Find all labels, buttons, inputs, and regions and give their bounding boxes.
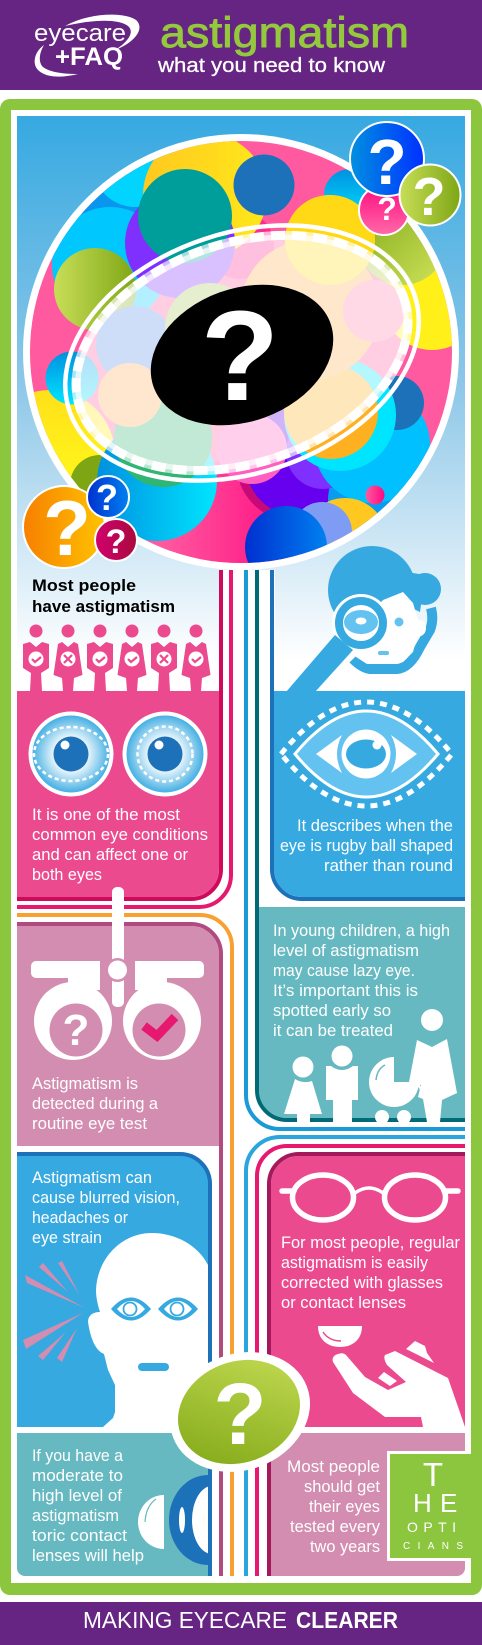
icon: person with magnifier xyxy=(286,546,441,692)
text: rugby ball: rather than round xyxy=(324,856,453,875)
text: common condition xyxy=(32,805,208,884)
text: common condition: common eye conditions xyxy=(32,825,208,844)
title: astigmatism xyxy=(160,9,409,57)
text: correction: For most people, regular xyxy=(281,1233,460,1252)
text: lazy eye: may cause lazy eye. xyxy=(273,961,415,980)
text: symptoms: cause blurred vision, xyxy=(32,1188,180,1207)
logo: eyecare FAQ: eyecare xyxy=(34,20,126,47)
icon: family with pram xyxy=(284,1009,457,1124)
main colourful eye disc xyxy=(23,134,459,570)
logo: eyecare FAQ xyxy=(34,15,139,77)
text: lazy eye xyxy=(273,921,450,1040)
icon: contact lens on hand xyxy=(318,1326,465,1427)
heading: have astigmatism xyxy=(32,597,175,616)
text: symptoms: eye strain xyxy=(32,1228,102,1247)
panel: symptoms xyxy=(17,1154,210,1427)
text: toric lenses: If you have a xyxy=(32,1446,124,1465)
text: correction: astigmatism is easily xyxy=(281,1253,428,1272)
icon: phoropter: ? xyxy=(63,1006,89,1055)
text: rugby ball: eye is rugby ball shaped xyxy=(280,836,453,855)
pipes xyxy=(17,570,465,1576)
text: toric lenses: moderate to xyxy=(32,1466,123,1485)
logo: the opticians eye chart: H xyxy=(413,1488,432,1518)
text: common condition: and can affect one or xyxy=(32,845,188,864)
header band xyxy=(0,0,482,90)
text: two years: tested every xyxy=(290,1517,380,1536)
text: eye test: detected during a xyxy=(32,1094,159,1113)
icon: normal eye xyxy=(124,714,206,794)
text: two years: Most people xyxy=(287,1457,380,1476)
panel: eye test xyxy=(17,887,221,1576)
text: correction: corrected with glasses xyxy=(281,1273,443,1292)
text: rugby ball xyxy=(280,816,453,875)
logo: the opticians eye chart: T xyxy=(423,1456,443,1493)
logo: the opticians eye chart xyxy=(387,1451,482,1561)
question bubbles bottom left: ? xyxy=(96,477,118,518)
text: toric lenses: toric contact xyxy=(32,1526,127,1545)
text: lazy eye: it can be treated xyxy=(273,1021,393,1040)
panel: most people have astigmatism xyxy=(23,576,210,691)
question bubbles top right: ? xyxy=(367,126,407,198)
text: eye test: Astigmatism is xyxy=(32,1074,138,1093)
text: lazy eye: spotted early so xyxy=(273,1001,391,1020)
panel: glasses or contact lenses xyxy=(269,1154,465,1576)
text: symptoms xyxy=(32,1168,180,1247)
text: eye test: routine eye test xyxy=(32,1114,147,1133)
panel: young children xyxy=(257,570,465,1124)
central green question bubble xyxy=(152,1332,328,1492)
logo: the opticians eye chart: CIANS xyxy=(403,1541,463,1552)
text: rugby ball: It describes when the xyxy=(297,816,453,835)
text: two years: should get xyxy=(304,1477,380,1496)
text: common condition: both eyes xyxy=(32,865,102,884)
icon: head with headache rays xyxy=(23,1233,208,1427)
panel: toric contact lenses xyxy=(17,1433,212,1576)
question bubbles top right: ? xyxy=(377,191,397,227)
question bubbles bottom left: ? xyxy=(43,484,91,572)
text: lazy eye: It’s important this is xyxy=(273,981,418,1000)
text: common condition: It is one of the most xyxy=(32,805,180,824)
question bubbles top right: ? xyxy=(412,167,446,227)
text: symptoms: Astigmatism can xyxy=(32,1168,152,1187)
central green question bubble: ? xyxy=(213,1366,267,1463)
question bubbles top right xyxy=(350,122,460,235)
footer band xyxy=(0,1602,482,1645)
icon: phoropter xyxy=(31,887,204,1060)
logo: the opticians eye chart: E xyxy=(440,1488,457,1518)
text: toric lenses: lenses will help xyxy=(32,1546,144,1565)
text: two years xyxy=(287,1457,380,1556)
panel: test every two years xyxy=(271,1433,482,1576)
subtitle: what you need to know xyxy=(157,55,386,77)
text: correction xyxy=(281,1233,460,1312)
text: eye test xyxy=(32,1074,159,1133)
text: lazy eye: level of astigmatism xyxy=(273,941,419,960)
text: toric lenses: high level of xyxy=(32,1486,122,1505)
lens overlay xyxy=(31,181,453,525)
question bubbles bottom left: ? xyxy=(106,523,126,561)
icon: toric lens and eye xyxy=(138,1475,208,1565)
text: two years: their eyes xyxy=(309,1497,380,1516)
logo: eyecare FAQ: +FAQ xyxy=(55,43,123,71)
text: two years: two years xyxy=(310,1537,380,1556)
text: toric lenses xyxy=(32,1446,144,1565)
text: symptoms: headaches or xyxy=(32,1208,128,1227)
icon: six people with checks and crosses xyxy=(23,624,210,691)
black pupil with question mark xyxy=(131,260,353,450)
text: toric lenses: astigmatism xyxy=(32,1506,119,1525)
text: correction: or contact lenses xyxy=(281,1293,406,1312)
footer band: CLEARER xyxy=(296,1607,398,1633)
black pupil with question mark: ? xyxy=(201,285,279,428)
heading: Most people xyxy=(32,576,136,595)
panel: common eye conditions xyxy=(17,570,221,899)
icon: astigmatic eye xyxy=(30,714,112,794)
panel: rugby ball shaped xyxy=(272,546,465,899)
question bubbles bottom left xyxy=(23,476,137,572)
icon: glasses xyxy=(282,1175,458,1220)
logo: the opticians eye chart: OPTI xyxy=(407,1519,456,1535)
footer band: MAKING EYECARE xyxy=(83,1607,287,1633)
icon: rugby ball eye xyxy=(281,702,452,806)
heading xyxy=(32,576,175,616)
text: lazy eye: In young children, a high xyxy=(273,921,450,940)
